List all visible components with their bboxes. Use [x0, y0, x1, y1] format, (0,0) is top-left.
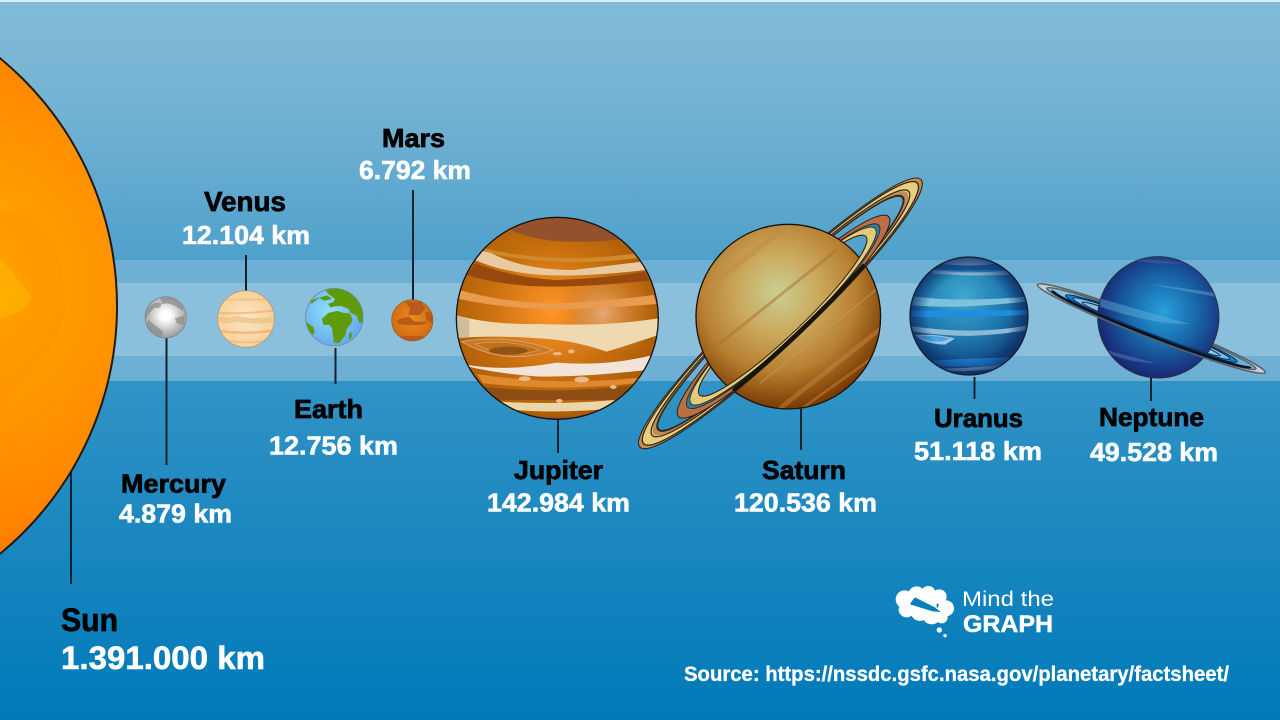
label: Mercury — [119, 468, 232, 528]
label: Jupiter — [487, 455, 630, 518]
label: Sun — [61, 602, 265, 676]
label: Neptune: Neptune — [1099, 402, 1204, 432]
source citation: Source: https://nssdc.gsfc.nasa.gov/planetary/factsheet/ — [684, 663, 1229, 686]
label: Earth: Earth — [294, 394, 363, 424]
label: Venus — [182, 186, 310, 250]
planet: Venus — [218, 291, 274, 347]
logo wordmark: Mind the — [962, 588, 1054, 611]
label: Earth: 12.756 km — [269, 430, 398, 460]
label: Jupiter: 142.984 km — [487, 488, 630, 518]
logo: Mind the Graph — [896, 586, 1054, 638]
label: Earth — [269, 394, 398, 460]
label: Saturn: 120.536 km — [734, 488, 877, 518]
label: Jupiter: Jupiter — [514, 455, 603, 485]
planet: Uranus — [910, 257, 1028, 375]
leader lines — [71, 190, 1151, 584]
planet: Mercury — [145, 297, 186, 338]
planet: Mars — [392, 300, 433, 343]
label: Sun: 1.391.000 km — [61, 640, 265, 676]
planet: Neptune with ring — [1034, 257, 1269, 381]
Neptune ring behind planet — [1034, 276, 1269, 381]
label: Neptune — [1090, 402, 1218, 467]
label: Saturn: Saturn — [762, 455, 846, 485]
label: Uranus: Uranus — [934, 403, 1023, 433]
label: Saturn — [734, 455, 877, 518]
Saturn globe — [696, 224, 883, 410]
label: Mercury: Mercury — [121, 468, 227, 498]
Saturn rings in front of planet — [642, 182, 923, 450]
planet: Earth — [305, 287, 367, 346]
icon: brain — [896, 586, 954, 637]
label: Neptune: 49.528 km — [1090, 437, 1218, 467]
Neptune ring in front of planet — [1036, 284, 1266, 374]
Saturn rings behind planet — [620, 159, 941, 468]
label: Uranus — [914, 403, 1042, 466]
label: Mars: 6.792 km — [359, 155, 471, 185]
label: Uranus: 51.118 km — [914, 436, 1042, 466]
planet: Jupiter — [455, 213, 660, 423]
planet: Sun — [0, 0, 117, 627]
planet: Saturn with rings — [638, 178, 923, 450]
label: Sun: Sun — [61, 602, 118, 638]
label: Mercury: 4.879 km — [119, 498, 232, 528]
label: Venus: Venus — [204, 186, 286, 217]
Neptune globe — [1098, 257, 1219, 378]
label: Mars — [359, 123, 471, 185]
logo: Mind the Graph: GRAPH — [963, 611, 1053, 638]
label: Mars: Mars — [382, 123, 445, 153]
label: Venus: 12.104 km — [182, 220, 310, 250]
